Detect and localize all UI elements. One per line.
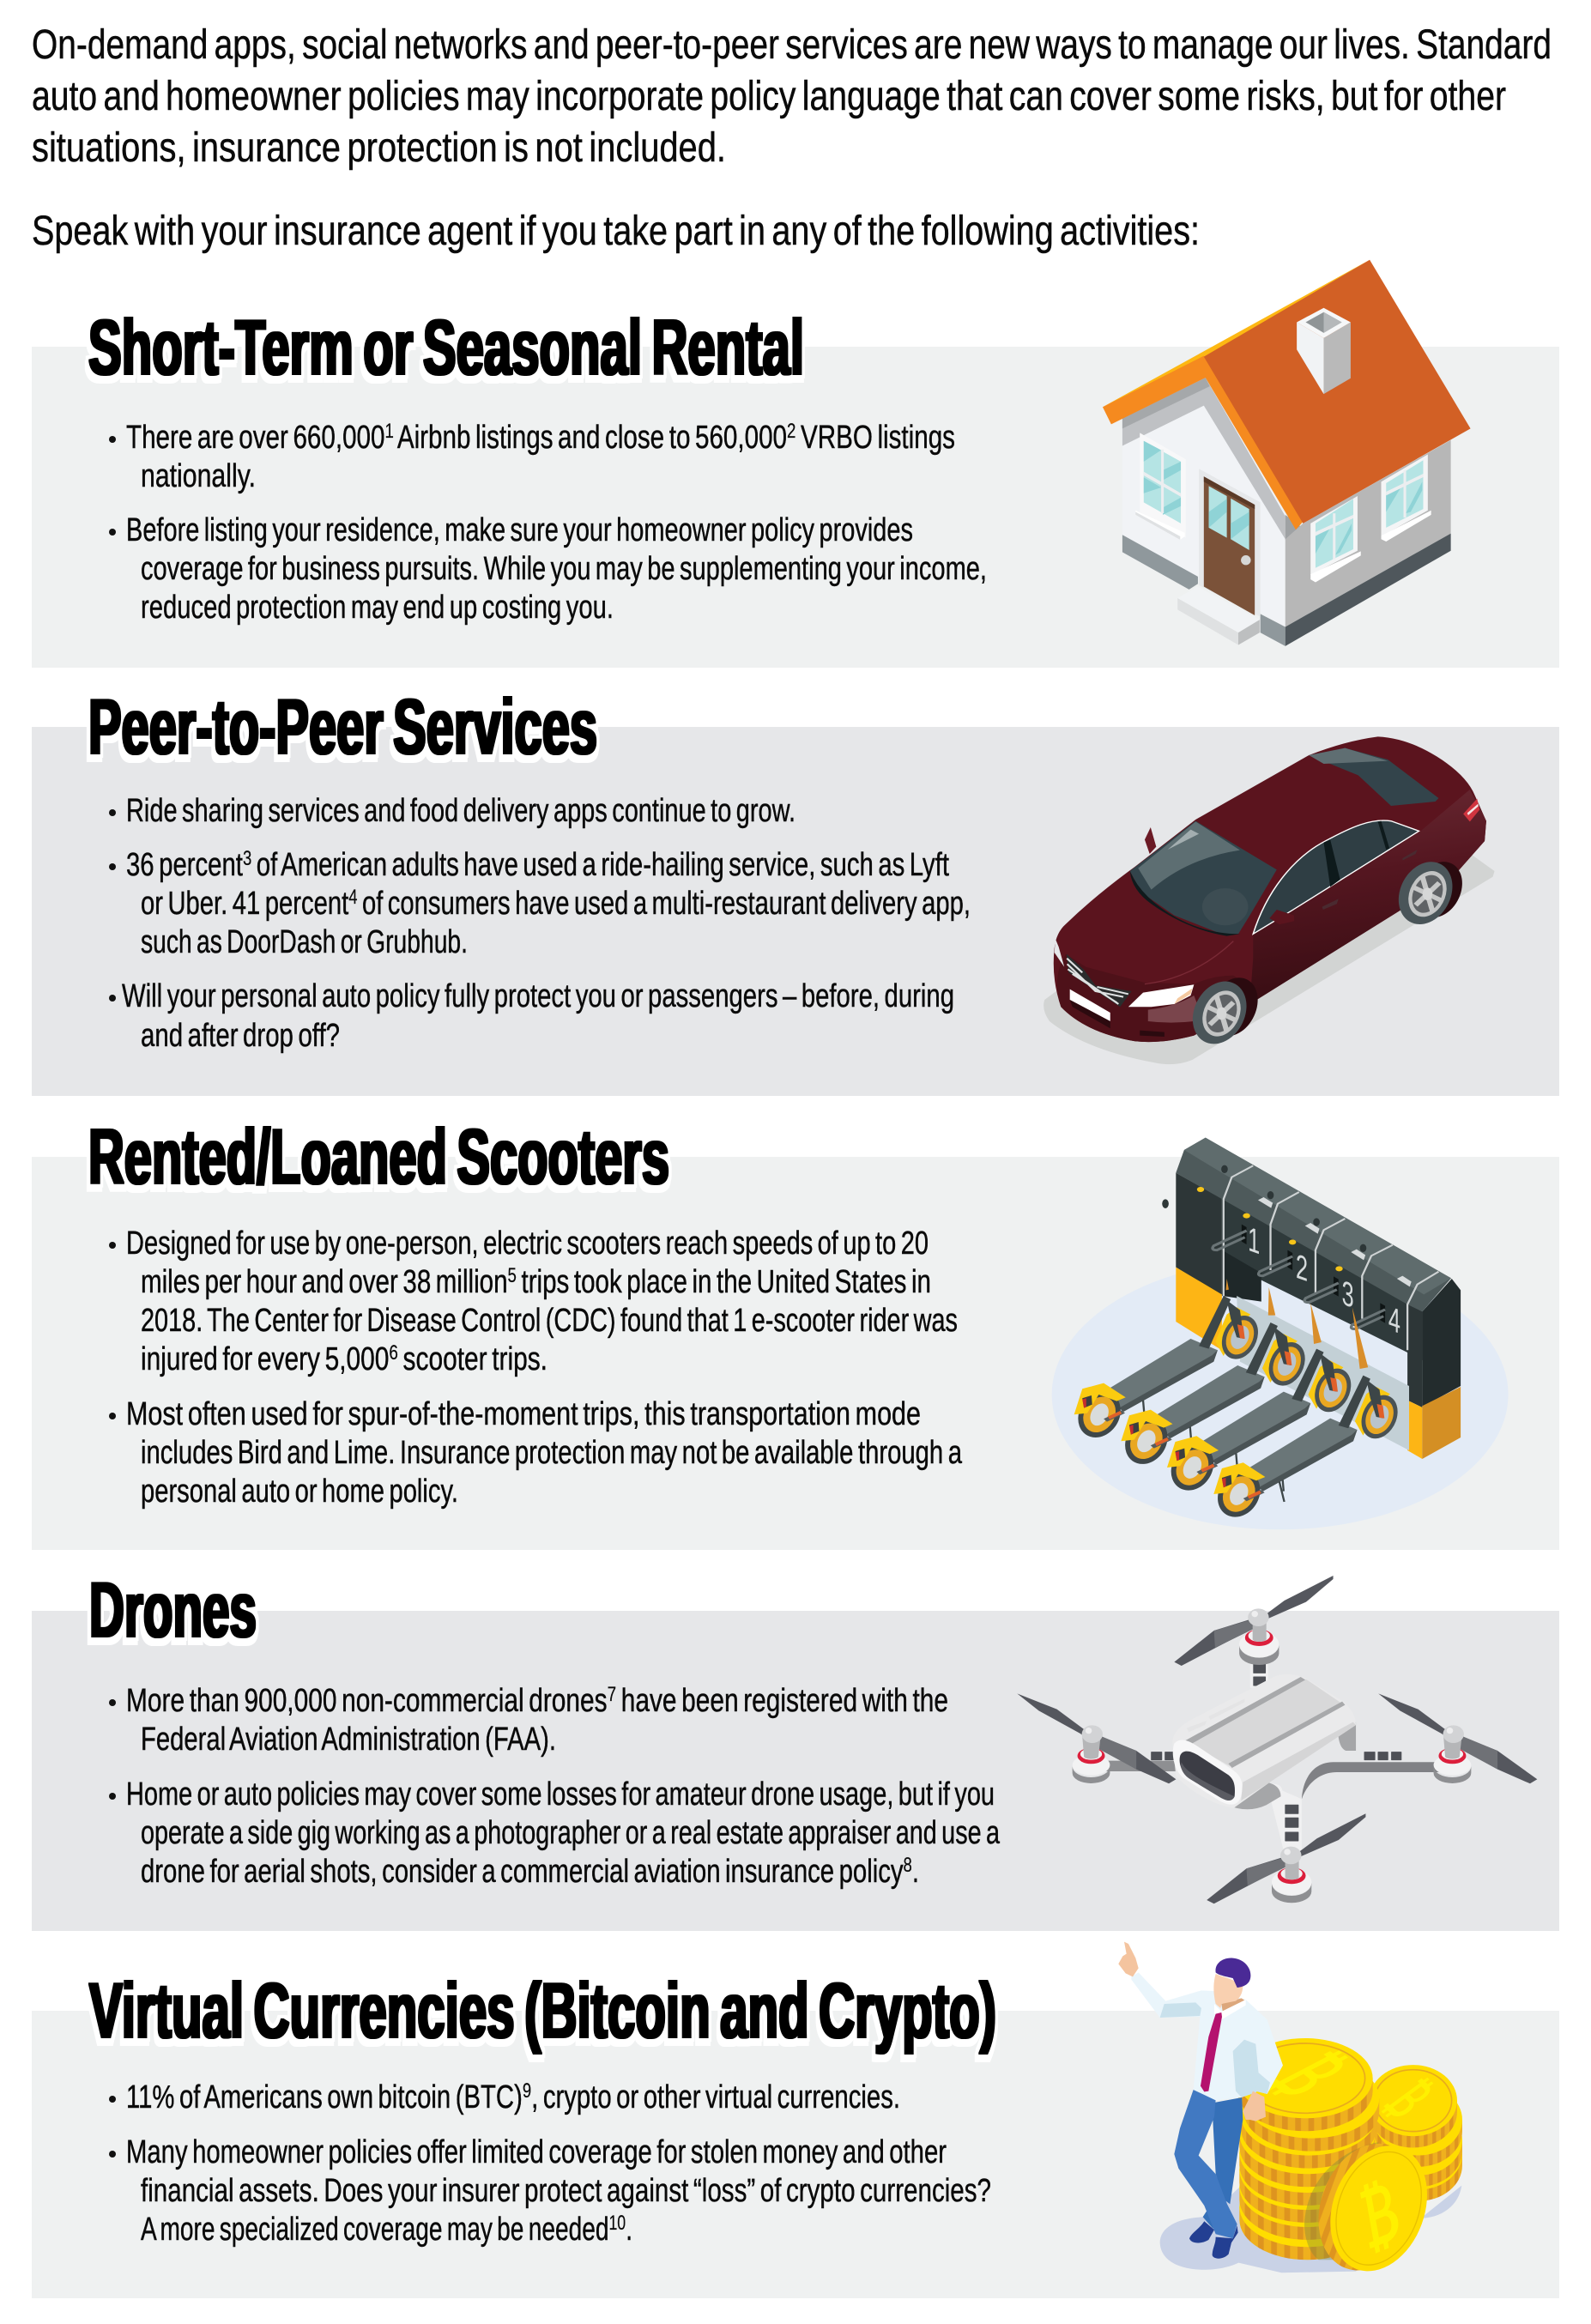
dock rack: 4 [1388, 1299, 1400, 1342]
bottom rotor [1207, 1813, 1365, 1903]
scooters [1071, 1296, 1404, 1522]
bullets: short-term rental: 2 [787, 420, 796, 443]
bullets: peer-to-peer: 36 percent [126, 847, 277, 883]
bullets: drones: drone for aerial shots, consider a commercial aviation insurance policy [141, 1854, 1129, 1890]
left rotor [1017, 1693, 1176, 1783]
heading: short-term rental: Short-Term or Seasonal Rental [88, 305, 804, 391]
front left window [1135, 433, 1186, 540]
heading: peer-to-peer: Peer-to-Peer Services [88, 684, 597, 771]
bullets: drones: Home or auto policies may cover some losses for amateur drone usage, but if you [126, 1776, 995, 1813]
bullets: peer-to-peer [109, 793, 971, 1054]
bullets: virtual currencies: , crypto or other virtual currencies. [531, 2079, 900, 2115]
drone body [1172, 1674, 1356, 1809]
dock rack: 2 [1296, 1247, 1308, 1290]
bullets: scooters: trips took place in the United States in [517, 1264, 931, 1300]
headlight [1128, 984, 1194, 1007]
dock numbers: 1 [1248, 1219, 1260, 1262]
main coin stack [1237, 2038, 1379, 2260]
intro paragraph [32, 22, 1552, 171]
bullets: scooters: 2018. The Center for Disease Control (CDC) found that 1 e-scooter rider was [141, 1303, 958, 1339]
intro paragraph: situations, insurance protection is not included. [32, 125, 726, 171]
bullets: drones: Federal Aviation Administration (FAA). [141, 1722, 556, 1758]
bullets: peer-to-peer: Ride sharing services and food delivery apps continue to grow. [126, 793, 796, 829]
side windows [1253, 820, 1419, 934]
businessman [1118, 1942, 1283, 2259]
bullets: virtual currencies: A more specialized coverage may be needed [141, 2212, 774, 2248]
bullets: scooters: Most often used for spur-of-the-moment trips, this transportation mode [126, 1396, 921, 1432]
icon: quadcopter drone [1017, 1576, 1537, 1903]
bullets: scooters: 5 [508, 1264, 517, 1287]
bullets: peer-to-peer: Will your personal auto policy fully protect you or passengers – before, during [122, 978, 954, 1014]
bullets: peer-to-peer: such as DoorDash or Grubhub. [141, 924, 468, 960]
bullets: peer-to-peer: of consumers have used a multi-restaurant delivery app, [357, 886, 971, 922]
roof [1103, 260, 1471, 530]
standing coin [1302, 2129, 1444, 2285]
tail light [1463, 799, 1479, 821]
bullets: virtual currencies: 10 [608, 2212, 626, 2235]
bullets: drones: 7 [608, 1683, 616, 1706]
number plate [1070, 990, 1110, 1021]
right windows [1310, 455, 1431, 583]
bullets: peer-to-peer: 3 [243, 847, 251, 870]
bullets: drones: have been registered with the [616, 1683, 948, 1719]
bullets: peer-to-peer: of American adults have used a ride-hailing service, such as Lyft [251, 847, 949, 883]
bullets: short-term rental: reduced protection may end up costing you. [141, 590, 614, 626]
icon: man leaning on bitcoin stacks [1118, 1942, 1462, 2285]
chimney [1297, 308, 1351, 394]
bullets: short-term rental: coverage for business pursuits. While you may be supplementing your income, [141, 551, 987, 587]
bullets: drones: operate a side gig working as a photographer or a real estate appraiser and use a [141, 1815, 1001, 1851]
bullets: virtual currencies [109, 2079, 991, 2248]
bullets: short-term rental: VRBO listings [796, 420, 955, 456]
bullets: scooters: injured for every 5,000 [141, 1341, 457, 1377]
bullets: scooters: miles per hour and over 38 million [141, 1264, 613, 1300]
wheels [1184, 856, 1470, 1050]
bullets: drones: More than 900,000 non-commercial drones [126, 1683, 738, 1719]
bullets: scooters [109, 1226, 963, 1510]
bullets: scooters: scooter trips. [398, 1341, 547, 1377]
bullets: scooters: personal auto or home policy. [141, 1474, 458, 1510]
bullets: drones: . [912, 1854, 919, 1890]
panel: short-term or seasonal rental [32, 305, 1559, 668]
rear window [1309, 748, 1438, 806]
bullets: virtual currencies: Many homeowner policies offer limited coverage for stolen money and other [126, 2134, 947, 2170]
bullets: peer-to-peer: and after drop off? [141, 1018, 340, 1054]
bullets: short-term rental: Airbnb listings and close to 560,000 [394, 420, 787, 456]
bullets: virtual currencies: 11% of Americans own bitcoin (BTC) [126, 2079, 640, 2115]
bullets: scooters: includes Bird and Lime. Insurance protection may not be available through a [141, 1435, 963, 1471]
dock rack [1176, 1138, 1461, 1459]
rear coin stack [1369, 2065, 1462, 2201]
heading: scooters: Rented/Loaned Scooters [88, 1114, 669, 1201]
icon: isometric house [1103, 260, 1471, 646]
top rotor [1174, 1576, 1334, 1666]
heading: virtual currencies: Virtual Currencies (Bitcoin and Crypto) [89, 1968, 996, 2055]
bullets: drones [109, 1683, 1001, 1890]
bullets: virtual currencies: 9 [523, 2079, 531, 2103]
bullets: virtual currencies: financial assets. Does your insurer protect against “loss” of crypto currencies? [141, 2173, 991, 2209]
bullets: scooters: Designed for use by one-person, electric scooters reach speeds of up to 20 [126, 1226, 929, 1262]
bullets: short-term rental [109, 420, 987, 626]
panel: virtual currencies [32, 1968, 1559, 2298]
dock rack: 3 [1342, 1274, 1354, 1316]
bullets: short-term rental: 1 [384, 420, 394, 443]
drone arms [1100, 1648, 1442, 1854]
panel: drones [32, 1567, 1559, 1931]
icon: e-scooter docking station [1052, 1138, 1509, 1529]
bullets: peer-to-peer: or Uber. 41 percent [141, 886, 411, 922]
heading: drones: Drones [89, 1567, 257, 1654]
bullets: drones: 8 [904, 1854, 912, 1877]
door [1199, 469, 1261, 617]
right rotor [1378, 1693, 1537, 1783]
bullets: short-term rental: Before listing your residence, make sure your homeowner policy provides [126, 512, 913, 548]
intro call to action: Speak with your insurance agent if you take part in any of the following activities: [32, 209, 1200, 254]
bullets: scooters: 6 [389, 1341, 398, 1365]
icon: isometric car [1044, 736, 1495, 1064]
grille [1067, 954, 1132, 1007]
bullets: virtual currencies: . [626, 2212, 632, 2248]
windscreen [1130, 821, 1277, 936]
panel: rented/loaned scooters [32, 1114, 1559, 1550]
bullets: peer-to-peer: 4 [348, 886, 357, 909]
panel: peer-to-peer services [32, 684, 1559, 1096]
bullets: short-term rental: nationally. [141, 458, 256, 494]
bullets: short-term rental: There are over 660,000 [126, 420, 458, 456]
doorstep [1177, 587, 1260, 645]
